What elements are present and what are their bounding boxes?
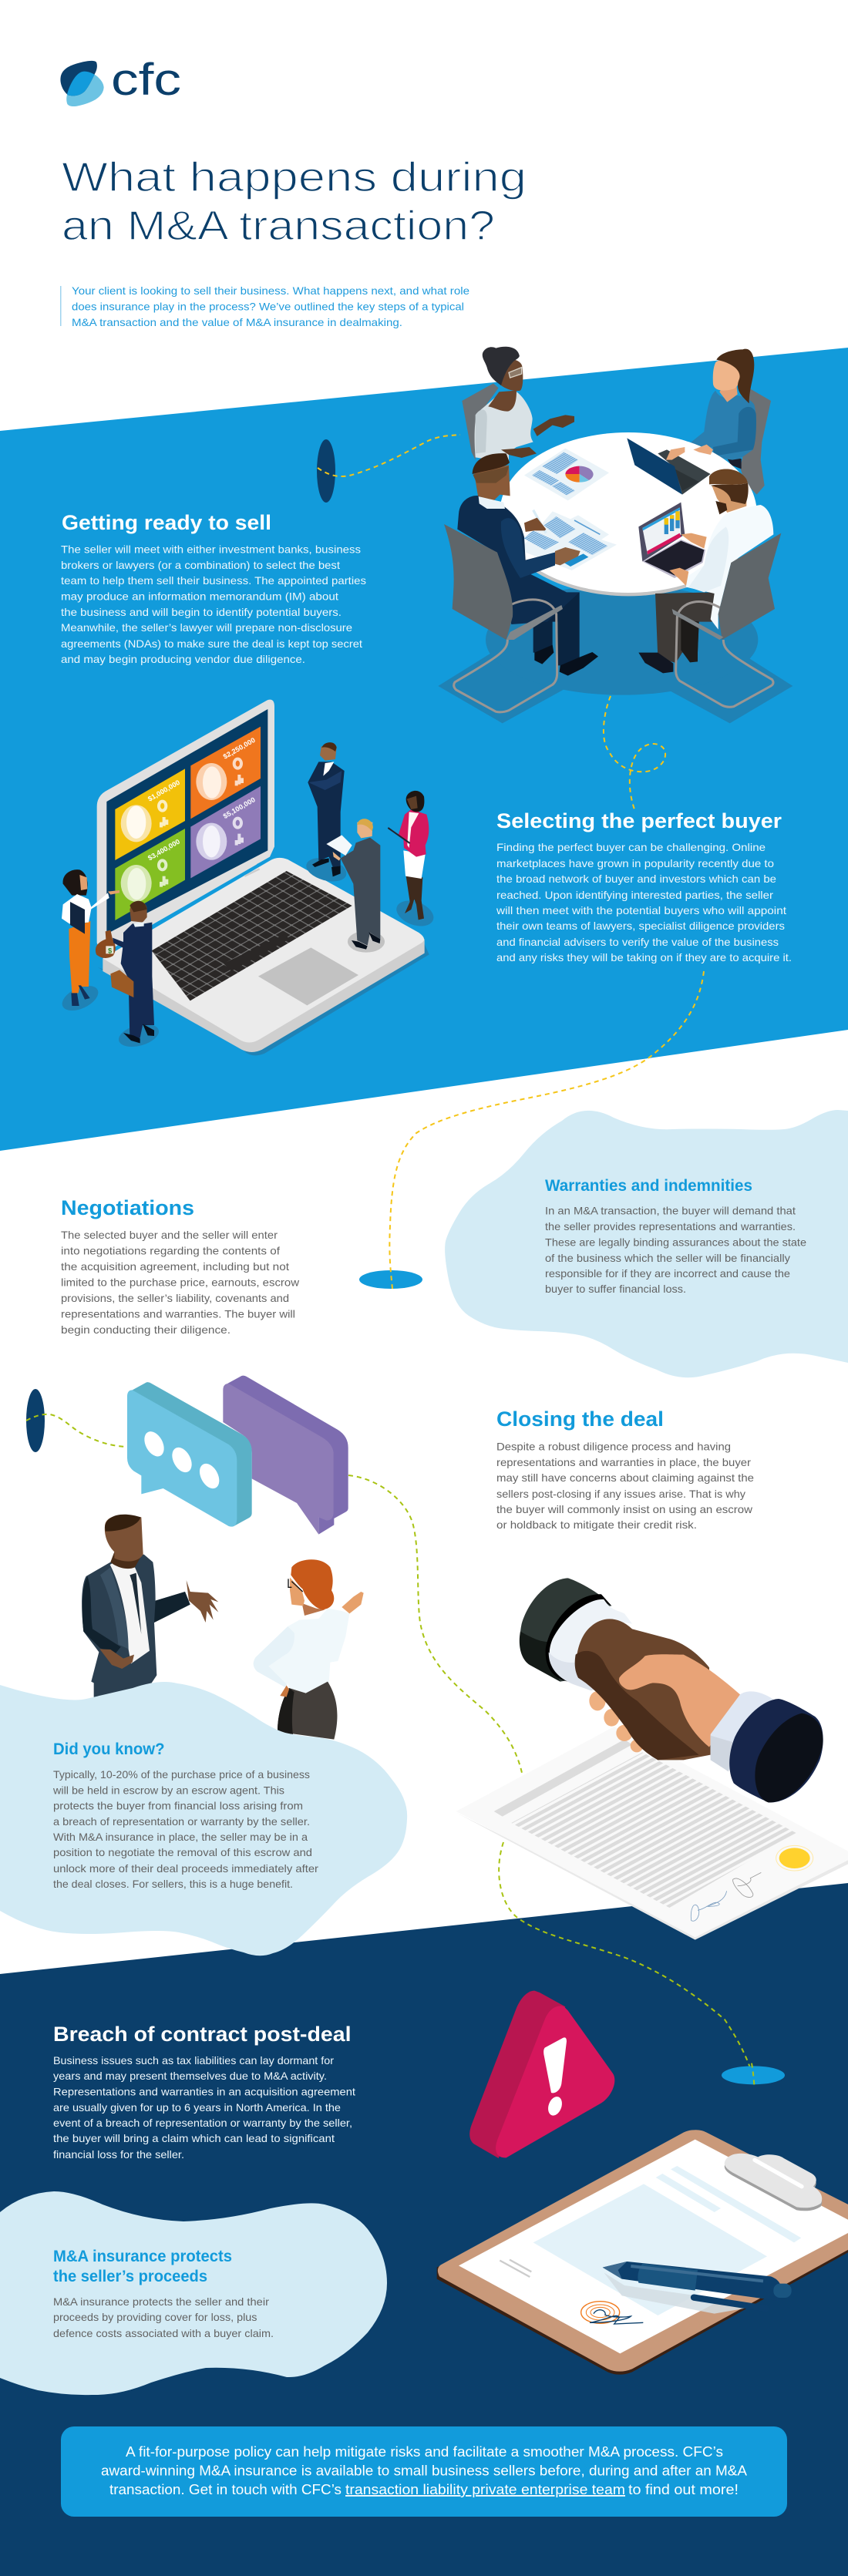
hands shaking (520, 1578, 823, 1802)
illustration: warning triangle and clipboard (437, 1991, 848, 2375)
blob: warranties panel (445, 1110, 848, 1377)
text: warranties body: the seller provides representations and warranties. (545, 1220, 796, 1233)
text: selecting body: their own teams of lawyers, specialist diligence providers (496, 920, 785, 932)
dashed connector: oval to speech bubbles (26, 1389, 127, 1452)
text: warranties body: of the business which the seller will be financially (545, 1252, 790, 1264)
call to action panel: transaction. Get in touch with CFC’s (109, 2482, 342, 2497)
person: man in suit (82, 1515, 218, 1701)
text: negotiations body: the acquisition agreement, including but not (61, 1260, 289, 1273)
title (62, 154, 527, 249)
text: negotiations body: begin conducting their diligence. (61, 1323, 231, 1336)
text: negotiations body: representations and warranties. The buyer will (61, 1307, 295, 1320)
text: selecting body: Finding the perfect buyer can be challenging. Online (496, 841, 766, 853)
heading: getting ready to sell: Getting ready to sell (62, 511, 271, 534)
person: man with briefcase: $ (108, 947, 113, 955)
dashed connector: meeting to selecting (604, 696, 665, 809)
table (500, 432, 757, 596)
text: negotiations body: The selected buyer and the seller will enter (61, 1229, 278, 1241)
call to action panel (61, 2426, 787, 2517)
pen (603, 2262, 792, 2314)
text: selecting body (496, 841, 792, 963)
text: M&A insurance body: proceeds by providing cover for loss, plus (53, 2311, 257, 2323)
call to action panel: award-winning M&A insurance is available to small business sellers before, during and after an M&A (101, 2463, 747, 2479)
title: What happens during (62, 154, 527, 200)
intro text block (60, 284, 469, 328)
text: warranties body: buyer to suffer financial loss. (545, 1283, 686, 1295)
laptop: far (627, 438, 713, 495)
text: negotiations body (61, 1229, 300, 1336)
text: did you know body: a breach of representation or warranty by the seller. (53, 1815, 310, 1828)
icon: warning triangle (469, 1991, 614, 2158)
logo: cfc: cfc (111, 55, 181, 105)
text: getting ready body: and may begin producing vendor due diligence. (61, 653, 305, 665)
text: M&A insurance body: M&A insurance protects the seller and their (53, 2295, 269, 2308)
speech bubble: blue (127, 1382, 252, 1527)
text: negotiations body: into negotiations regarding the contents of (61, 1244, 280, 1256)
text: negotiations body: provisions, the seller’s liability, covenants and (61, 1292, 289, 1304)
text: did you know body: protects the buyer from financial loss arising from (53, 1799, 303, 1811)
dashed connector: oval to meeting (317, 435, 460, 503)
text: getting ready body: Meanwhile, the seller’s lawyer will prepare non-disclosure (61, 621, 352, 634)
speech bubble: purple (223, 1376, 348, 1535)
person: man in white shirt (638, 469, 773, 673)
signature stamp (581, 2302, 643, 2324)
oval: breach connector end (722, 2063, 785, 2085)
intro text block: Your client is looking to sell their business. What happens next, and what role (72, 284, 469, 297)
person: woman with glasses (462, 347, 574, 462)
intro text block: does insurance play in the process? We’ve outlined the key steps of a typical (72, 301, 464, 313)
section: navy band (0, 1883, 848, 2576)
intro text block: M&A transaction and the value of M&A insurance in dealmaking. (72, 316, 402, 328)
logo: cfc (60, 60, 180, 106)
person: man with crossed arms (304, 742, 349, 886)
text: warranties body: These are legally binding assurances about the state (545, 1236, 806, 1249)
text: did you know body: unlock more of their deal proceeds immediately after (53, 1862, 318, 1875)
text: selecting body: and financial advisers to verify the value of the business (496, 936, 779, 948)
call to action panel: transaction liability private enterprise team (345, 2482, 625, 2497)
text: did you know body: With M&A insurance in place, the seller may be in a (53, 1831, 308, 1843)
text: did you know body: will be held in escrow by an escrow agent. This (52, 1784, 284, 1796)
heading: selecting the perfect buyer: Selecting the perfect buyer (496, 809, 782, 832)
text: breach body (53, 2054, 355, 2161)
text: closing body: Despite a robust diligence process and having (496, 1440, 731, 1452)
text: breach body: the buyer will bring a claim which can lead to significant (53, 2132, 335, 2144)
person: woman with ponytail (684, 349, 771, 495)
laptop screen: $3,400,000 (146, 838, 181, 862)
person: woman in orange trousers (59, 869, 119, 1016)
text: breach body: Representations and warranties in an acquisition agreement (53, 2086, 355, 2098)
person: blond man with tablet (326, 819, 385, 953)
text: selecting body: will then meet with the potential buyers who will appoint (496, 904, 786, 916)
call to action panel: to find out more! (628, 2482, 739, 2497)
text: getting ready body: agreements (NDAs) to make sure the deal is kept top secret (61, 637, 362, 650)
chair: front left (444, 524, 563, 712)
text: breach body: years and may present themselves due to M&A activity. (53, 2070, 327, 2082)
heading: warranties and indemnities: Warranties and indemnities (545, 1177, 752, 1195)
text: getting ready body: team to help them sell their business. The appointed parties (61, 574, 366, 587)
dashed connector: handshake to breach oval (499, 1842, 754, 2083)
person: man in navy suit (457, 453, 598, 676)
heading: did you know: Did you know? (53, 1740, 165, 1758)
text: getting ready body (61, 543, 366, 665)
keyboard (152, 871, 352, 1000)
person: man with briefcase (96, 901, 161, 1051)
illustration: meeting around a table (438, 347, 792, 723)
heading: M&A insurance protects: the seller’s proceeds (53, 2268, 207, 2285)
text: getting ready body: brokers or lawyers (or a combination) to select the best (61, 559, 340, 571)
laptop screen (97, 700, 274, 956)
heading: M&A insurance protects (53, 2248, 232, 2285)
illustration: laptop with people (59, 700, 437, 1055)
blob: M&A insurance panel (0, 2191, 387, 2395)
person: woman with red hair (254, 1559, 364, 1740)
laptop screen: $5,100,000 (222, 795, 257, 820)
text: M&A insurance body: defence costs associated with a buyer claim. (53, 2327, 274, 2339)
text: negotiations body: limited to the purchase price, earnouts, escrow (61, 1276, 300, 1289)
person: woman in pink jacket (388, 791, 437, 931)
heading: M&A insurance protects: M&A insurance protects (53, 2248, 232, 2265)
text: getting ready body: may produce an information memorandum (IM) about (61, 590, 338, 603)
laptop screen: $2,250,000 (222, 736, 257, 761)
heading: closing the deal: Closing the deal (496, 1407, 664, 1431)
text: did you know body: position to negotiate the removal of this escrow and (53, 1846, 312, 1858)
laptop screen: $1,000,000 (146, 779, 181, 803)
text: warranties body: In an M&A transaction, the buyer will demand that (545, 1204, 796, 1216)
text: getting ready body: The seller will meet with either investment banks, business (61, 543, 361, 555)
documents with pie chart (524, 449, 609, 500)
text: closing body: the buyer will commonly insist on using an escrow (496, 1503, 753, 1515)
illustration: two people with speech bubbles (82, 1376, 364, 1740)
text: warranties body (545, 1204, 806, 1295)
call to action panel: A fit-for-purpose policy can help mitigate risks and facilitate a smoother M&A process. CFC’s (126, 2444, 723, 2460)
section: blue band (0, 348, 848, 1151)
dashed connector: selecting to negotiations (359, 971, 704, 1289)
text: selecting body: and any risks they will be taking on if they are to acquire it. (496, 951, 792, 963)
text: breach body: are usually given for up to 6 years in North America. In the (53, 2101, 341, 2114)
clipboard (437, 2130, 848, 2375)
heading: breach of contract: Breach of contract post-deal (53, 2023, 352, 2046)
text: selecting body: the broad network of buyer and investors which can be (496, 873, 776, 885)
text: closing body: representations and warranties in place, the buyer (496, 1456, 751, 1468)
blob: did you know panel (0, 1682, 407, 1956)
text: did you know body: Typically, 10-20% of the purchase price of a business (53, 1768, 310, 1781)
contract document (456, 1727, 848, 1940)
text: selecting body: marketplaces have grown in popularity recently due to (496, 857, 774, 869)
text: breach body: financial loss for the seller. (53, 2148, 184, 2161)
text: breach body: Business issues such as tax liabilities can lay dormant for (53, 2054, 334, 2067)
heading: negotiations: Negotiations (61, 1196, 194, 1219)
text: closing body: may still have concerns about claiming against the (496, 1471, 754, 1484)
dashed connector: bubbles to handshake (348, 1475, 522, 1773)
text: M&A insurance body (53, 2295, 274, 2339)
text: did you know body: the deal closes. For sellers, this is a huge benefit. (53, 1878, 293, 1890)
text: selecting body: reached. Upon identifying interested parties, the seller (496, 889, 773, 901)
text: getting ready body: the business and will begin to identify potential buyers. (61, 606, 342, 618)
chair: front right (672, 533, 781, 707)
text: closing body: sellers post-closing if any issues arise. That is why (496, 1488, 745, 1500)
title: an M&A transaction? (62, 203, 495, 249)
text: breach body: event of a breach of representation or warranty by the seller, (53, 2117, 352, 2129)
laptop: near with chart (638, 503, 705, 578)
documents under pen (523, 510, 617, 570)
text: did you know body (52, 1768, 318, 1890)
text: warranties body: responsible for if they are incorrect and cause the (545, 1267, 790, 1280)
illustration: handshake over signed contract (456, 1578, 848, 1940)
text: closing body: or holdback to mitigate their credit risk. (496, 1518, 697, 1531)
text: closing body (496, 1440, 754, 1531)
